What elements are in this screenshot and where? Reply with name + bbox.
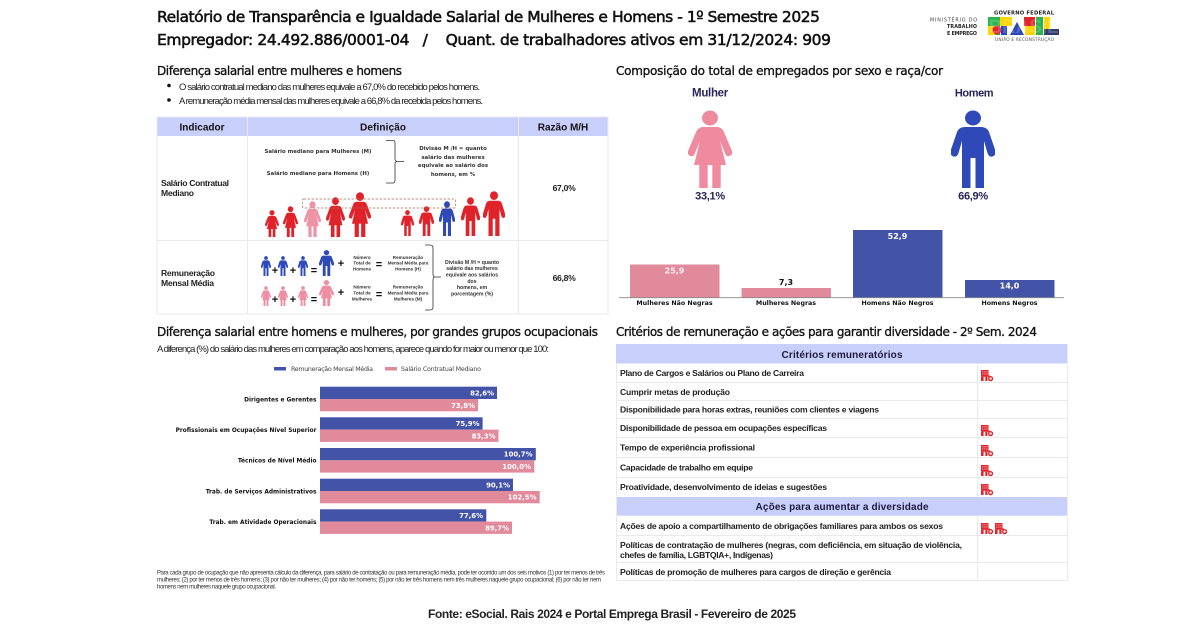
formula: homens: Remuneração	[393, 255, 423, 260]
formula: mulheres: Mulheres	[352, 296, 373, 302]
row: remuneração mensal média: 66,8%	[553, 273, 576, 283]
icon row: median women and men	[265, 191, 505, 237]
logo: ministério e governo federal	[930, 10, 1059, 43]
logo: ministério e governo federal: BRASIL	[988, 17, 1059, 38]
group: serviços administrativos: Trab. de Serviços Administrativos	[206, 489, 317, 495]
pictogram: mulher: Mulher	[692, 88, 729, 100]
horizontal bar chart	[176, 387, 540, 534]
row: políticas de contratação: Políticas de contratação de mulheres (negras, com deficiência, em situação de violência,	[620, 540, 962, 550]
row: proatividade	[620, 482, 992, 495]
formula: mulheres: +	[338, 287, 344, 299]
bar chart: sexo e raça/cor: Mulheres Negras	[756, 300, 816, 307]
definition text	[264, 140, 488, 183]
bar chart: sexo e raça/cor: 14,0	[1000, 282, 1020, 290]
group: serviços administrativos: 102,5%	[508, 494, 537, 502]
group: atividade operacional: Trab. em Atividade Operacionais	[209, 520, 317, 526]
formula result text: porcentagem (%)	[451, 292, 493, 298]
formula: mulheres: Mensal Média para	[388, 290, 429, 296]
bar chart: sexo e raça/cor: 7,3	[779, 278, 793, 287]
formula: mulheres: Mulheres (M)	[394, 296, 423, 302]
pictogram: mulher: 33,1%	[695, 190, 725, 202]
bar chart: sexo e raça/cor: Homens Não Negros	[861, 300, 934, 307]
table: critérios e ações	[616, 344, 1068, 580]
formula result text	[425, 245, 499, 310]
formula: homens	[261, 250, 429, 277]
pictogram: mulher	[688, 88, 732, 202]
row: obrigações familiares: Ações de apoio a compartilhamento de obrigações familiares para ambos os sexos	[620, 521, 943, 531]
heading: composição: Composição do total de empregados por sexo e raça/cor	[616, 64, 943, 78]
row: políticas de contratação	[620, 540, 962, 560]
footnote: mulheres; (2) por ter menos de três homens; (3) por não ter mulheres; (4) por não ter homens; (5) por não ter três homens nem três mulheres naquele grupo ocupacional; (6) por não ter nem	[157, 578, 601, 584]
logo: ministério e governo federal: UNIÃO E RECONSTRUÇÃO	[995, 36, 1055, 43]
heading: diferença salarial: Diferença salarial entre mulheres e homens	[157, 64, 402, 78]
row: salário contratual mediano	[161, 140, 576, 237]
table: indicadores	[157, 117, 608, 314]
bar chart: sexo e raça/cor: Homens Negros	[981, 300, 1038, 307]
row: tempo de experiência	[620, 442, 992, 456]
row: remuneração mensal média	[161, 245, 576, 310]
title: Relatório de Transparência e Igualdade Salarial de Mulheres e Homens - 1º Semestre 2025	[157, 8, 820, 26]
row: salário contratual mediano: Mediano	[161, 188, 194, 198]
row: plano de cargos	[620, 368, 992, 381]
pictogram: homem	[950, 88, 996, 202]
formula: mulheres: +	[272, 294, 278, 306]
formula result text: dos	[467, 279, 477, 285]
row: salário contratual mediano: 67,0%	[553, 183, 576, 193]
formula result text: Divisão M /H = quanto	[445, 260, 499, 266]
formula: homens: Homens (H)	[395, 266, 421, 272]
definition text: salário das mulheres	[421, 154, 485, 161]
formula: homens: +	[338, 258, 344, 270]
row: ocupações específicas: Disponibilidade de pessoa em ocupações específicas	[620, 423, 827, 433]
formula: mulheres: +	[290, 294, 296, 306]
table: indicadores: Indicador	[179, 122, 225, 134]
formula: homens: +	[272, 265, 278, 277]
formula: mulheres: =	[311, 294, 317, 306]
formula: homens: Homens	[353, 266, 372, 272]
title: Empregador: 24.492.886/0001-04 / Quant. de trabalhadores ativos em 31/12/2024: 909	[157, 31, 831, 49]
pictogram: homem: Homem	[955, 88, 994, 100]
row: trabalho em equipe	[620, 462, 992, 476]
footnote	[157, 570, 605, 590]
title	[157, 8, 831, 49]
row: plano de cargos: Plano de Cargos e Salários ou Plano de Carreira	[620, 368, 804, 378]
row: trabalho em equipe: Capacidade de trabalho em equipe	[620, 462, 753, 472]
table: indicadores: Razão M/H	[538, 122, 588, 134]
subtitle: A diferença (%) do salário das mulheres em comparação aos homens, aparece quando for maior ou menor que 100:	[157, 344, 549, 355]
definition text: homens, em %	[431, 172, 476, 178]
legend: Salário Contratual Mediano	[401, 365, 481, 373]
row: tempo de experiência: Tempo de experiência profissional	[620, 442, 755, 452]
panel: critérios de remuneração e ações	[616, 325, 1068, 580]
footnote: Para cada grupo de ocupação que não apresenta cálculo da diferença, para salário de contratação ou para remuneração média, pode ter ocorrido um dos seis motivos (1) por ter menos de três	[157, 570, 605, 576]
row: remuneração mensal média: Remuneração	[161, 268, 215, 278]
row: horas extras: Disponibilidade para horas extras, reuniões com clientes e viagens	[620, 404, 879, 414]
formula: homens: =	[376, 259, 382, 271]
pictogram: homem: 66,9%	[958, 190, 988, 202]
row: ocupações específicas	[620, 423, 992, 436]
logo: ministério e governo federal: E EMPREGO	[947, 31, 977, 37]
bullet list: A remuneração média mensal das mulheres equivale a 66,8% da recebida pelos homens.	[179, 96, 483, 107]
group: dirigentes e gerentes	[244, 387, 497, 411]
group: técnicos de nível médio	[238, 448, 536, 473]
row: proatividade: Proatividade, desenvolvimento de ideias e sugestões	[620, 482, 827, 492]
heading: critérios: Critérios de remuneração e ações para garantir diversidade - 2º Sem. 2024	[616, 325, 1037, 339]
definition text: Salário mediano para Homens (H)	[267, 170, 369, 177]
section header: ações: Ações para aumentar a diversidade	[756, 502, 929, 513]
group: dirigentes e gerentes: 82,6%	[470, 390, 494, 398]
group: atividade operacional: 89,7%	[485, 524, 509, 532]
group: dirigentes e gerentes: Dirigentes e Gerentes	[244, 398, 317, 404]
row: remuneração mensal média: Mensal Média	[161, 278, 214, 288]
bar chart: sexo e raça/cor	[619, 230, 1064, 307]
logo: ministério e governo federal: TRABALHO	[947, 24, 977, 30]
group: serviços administrativos	[206, 479, 540, 503]
formula: mulheres: Número	[353, 284, 371, 290]
row: salário contratual mediano: Salário Contratual	[161, 178, 229, 188]
group: profissionais nível superior: 83,3%	[472, 432, 496, 440]
group: técnicos de nível médio: 100,0%	[502, 463, 531, 471]
row: políticas de promoção: Políticas de promoção de mulheres para cargos de direção e gerência	[620, 567, 891, 577]
formula result text: equivale aos salários	[446, 272, 498, 278]
definition text: Salário mediano para Mulheres (M)	[264, 148, 372, 155]
group: técnicos de nível médio: 100,7%	[504, 451, 533, 459]
formula: mulheres: Remuneração	[393, 284, 423, 290]
formula result text: salário das mulheres	[446, 266, 498, 272]
group: dirigentes e gerentes: 73,8%	[451, 402, 475, 410]
group: atividade operacional	[209, 509, 512, 534]
panel: diferença salarial entre mulheres e homens	[157, 64, 608, 314]
formula: homens: =	[311, 265, 317, 277]
row: obrigações familiares	[620, 521, 1006, 534]
formula result text: homens, em	[457, 285, 488, 291]
formula: homens: Mensal Média para	[388, 260, 429, 266]
group: profissionais nível superior: Profissionais em Ocupações Nível Superior	[176, 427, 317, 434]
group: profissionais nível superior	[176, 417, 498, 442]
logo: ministério e governo federal: MINISTÉRIO DO	[930, 16, 977, 24]
group: atividade operacional: 77,6%	[459, 512, 483, 520]
bar chart: sexo e raça/cor: Mulheres Não Negras	[636, 300, 713, 307]
legend: Remuneração Mensal Média	[291, 365, 373, 373]
table: indicadores: Definição	[360, 122, 406, 134]
panel: diferença por grandes grupos ocupacionais	[157, 325, 605, 590]
definition text: equivale ao salário dos	[418, 162, 488, 169]
bar chart: sexo e raça/cor: 25,9	[665, 266, 685, 276]
formula: mulheres	[261, 280, 429, 306]
panel: composição por sexo e raça/cor	[616, 64, 1064, 307]
footnote: homens nem mulheres naquele grupo ocupacional.	[157, 584, 276, 590]
formula: homens: +	[290, 265, 296, 277]
bullet list: O salário contratual mediano das mulheres equivale a 67,0% do recebido pelos homens.	[179, 82, 480, 93]
row: políticas de contratação: chefes de família, LGBTQIA+, Indígenas)	[620, 550, 773, 560]
group: profissionais nível superior: 75,9%	[456, 420, 480, 428]
definition text: Divisão M /H = quanto	[419, 146, 487, 152]
formula: homens: Total de	[353, 260, 371, 266]
section header: critérios remuneratórios: Critérios remuneratórios	[782, 350, 903, 361]
group: serviços administrativos: 90,1%	[486, 481, 510, 489]
row: metas de produção: Cumprir metas de produção	[620, 387, 730, 397]
source note: Fonte: eSocial. Rais 2024 e Portal Emprega Brasil - Fevereiro de 2025	[428, 607, 796, 621]
bullet list	[167, 82, 483, 107]
formula: mulheres: =	[376, 289, 382, 301]
logo: ministério e governo federal: GOVERNO FEDERAL	[994, 10, 1055, 16]
heading: grupos ocupacionais: Diferença salarial entre homens e mulheres, por grandes grupos ocupacionais	[157, 325, 598, 339]
formula: homens: Número	[353, 255, 371, 260]
bar chart: sexo e raça/cor: 52,9	[888, 232, 908, 241]
group: técnicos de nível médio: Técnicos de Nível Médio	[238, 458, 316, 465]
formula: mulheres: Total de	[353, 290, 371, 296]
legend	[274, 365, 481, 373]
